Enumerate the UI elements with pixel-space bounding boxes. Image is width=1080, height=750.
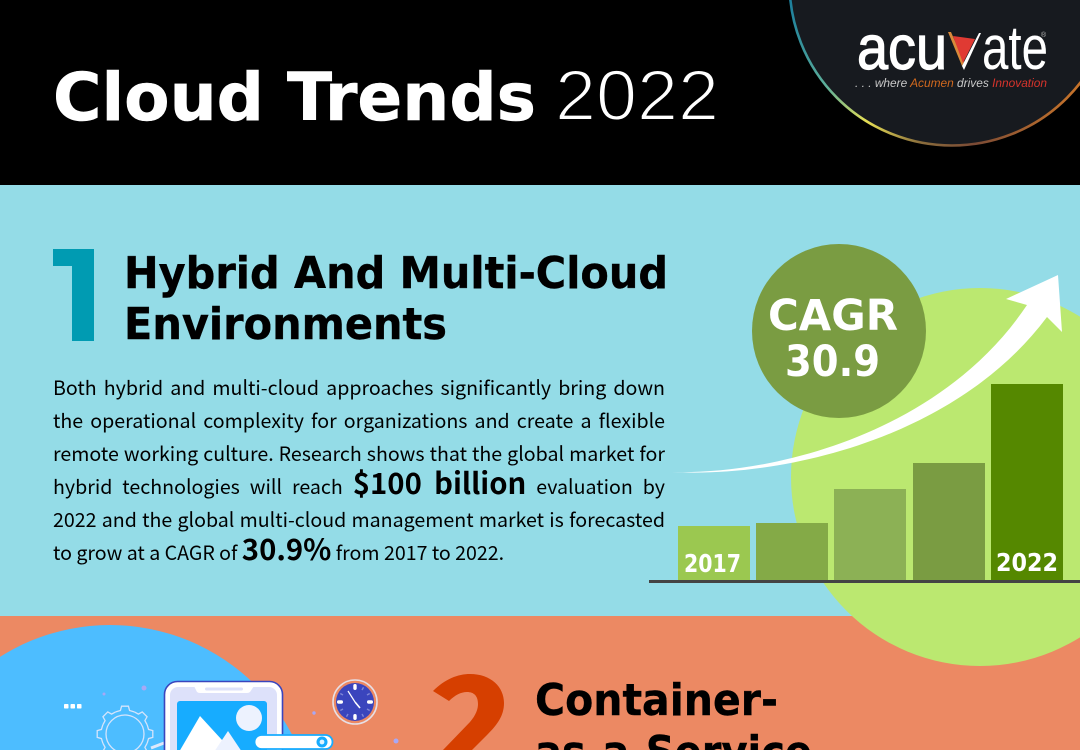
icon: search bar [254, 735, 332, 749]
text block: hybrid and multi-cloud description: to grow at a CAGR of 30.9% from 2017 to 2022. [53, 527, 504, 569]
heading: Container-as-a-Service: Container- [535, 675, 778, 726]
icon: curved connector [151, 743, 164, 748]
section number 1 [53, 249, 94, 341]
text block: hybrid and multi-cloud description: 2022 and the global multi-cloud management market is forecasted [53, 504, 665, 533]
text block: hybrid and multi-cloud description: hybrid technologies will reach $100 billion evaluation by [53, 461, 665, 503]
text block: hybrid and multi-cloud description: remote working culture. Research shows that the global market for [53, 438, 665, 467]
CAGR badge: 30.9 [785, 337, 880, 387]
heading: Hybrid And Multi-Cloud Environments: Hybrid And Multi-Cloud [124, 248, 668, 299]
panel: container-as-a-service section [0, 616, 1080, 750]
CAGR badge [752, 244, 926, 418]
green background circle [791, 288, 1080, 666]
blue background circle [0, 625, 316, 750]
title: Cloud Trends [53, 59, 536, 136]
heading: Container-as-a-Service [535, 675, 812, 750]
icon: clock [333, 680, 377, 724]
logo badge: ® [1041, 31, 1047, 39]
text block: hybrid and multi-cloud description: the operational complexity for organizations and create a flexible [53, 405, 665, 434]
panel: header background [0, 0, 1080, 185]
icon: three dots [64, 704, 82, 708]
icon: gear [97, 706, 153, 750]
heading: Hybrid And Multi-Cloud Environments: Environments [124, 299, 447, 350]
title: 2022 [555, 57, 719, 136]
decorative dots [102, 686, 398, 744]
logo badge: ate [982, 14, 1048, 83]
logo badge [790, 0, 1080, 146]
logo badge: acu [857, 14, 947, 83]
section number 2 [433, 674, 504, 750]
text block: hybrid and multi-cloud description [53, 372, 665, 569]
bar chart: 2017 [684, 549, 741, 578]
panel: hybrid and multi-cloud section [0, 185, 1080, 616]
CAGR badge: CAGR [768, 291, 898, 341]
bar chart [649, 384, 1080, 583]
growth arrow [672, 275, 1062, 473]
logo badge: . . . where Acumen drives Innovation [855, 78, 1047, 90]
icon: phone with image [164, 682, 282, 750]
text block: hybrid and multi-cloud description: Both hybrid and multi-cloud approaches significantly bring down [53, 372, 665, 401]
bar chart: 2022 [996, 548, 1058, 577]
heading: Hybrid And Multi-Cloud Environments [124, 248, 668, 350]
